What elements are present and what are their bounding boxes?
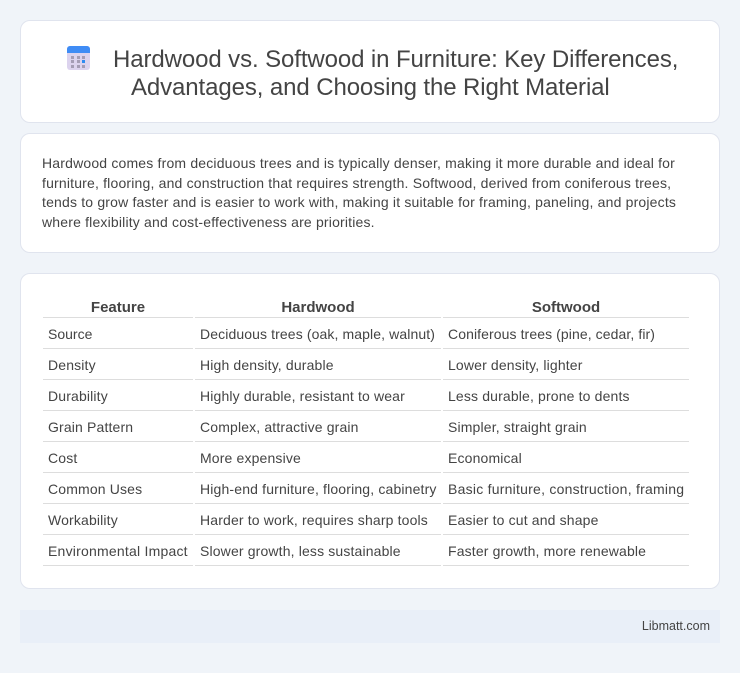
intro text: Hardwood comes from deciduous trees and is typically denser, making it more durable and ideal for [42, 155, 675, 171]
row: grain pattern: Complex, attractive grain [200, 419, 359, 435]
row: grain pattern: Grain Pattern [48, 419, 133, 435]
row: source: Source [48, 326, 92, 342]
row: common uses: Common Uses [48, 481, 142, 497]
row: cost: Cost [48, 450, 77, 466]
table header: Softwood [532, 299, 600, 316]
table header: Hardwood [281, 299, 355, 316]
intro text [42, 155, 676, 230]
row: workability: Easier to cut and shape [448, 512, 599, 528]
comparison table card [20, 273, 720, 589]
row: density: High density, durable [200, 357, 334, 373]
row: density: Lower density, lighter [448, 357, 583, 373]
row: cost [48, 450, 522, 466]
row: durability: Less durable, prone to dents [448, 388, 630, 404]
row: durability: Highly durable, resistant to wear [200, 388, 405, 404]
comparison table [43, 299, 689, 566]
row: durability [48, 388, 630, 404]
row: cost: Economical [448, 450, 522, 466]
row: source: Coniferous trees (pine, cedar, fir) [448, 326, 655, 342]
row: common uses: Basic furniture, construction, framing [448, 481, 684, 497]
footer bar [20, 610, 720, 643]
row: environmental impact: Environmental Impact [48, 543, 188, 559]
intro paragraph card [20, 133, 720, 253]
intro text: furniture, flooring, and construction that requires strength. Softwood, derived from coniferous trees, [42, 175, 671, 191]
table header [91, 299, 600, 316]
row: density [48, 357, 583, 373]
footer credit: Libmatt.com [642, 619, 710, 633]
title heading: Advantages, and Choosing the Right Material [131, 74, 610, 101]
row: workability: Harder to work, requires sharp tools [200, 512, 428, 528]
row: common uses: High-end furniture, flooring, cabinetry [200, 481, 437, 497]
row: source: Deciduous trees (oak, maple, walnut) [200, 326, 435, 342]
intro text: where flexibility and cost-effectiveness are priorities. [42, 214, 375, 230]
row: source [48, 326, 655, 342]
title heading [113, 46, 678, 101]
title card [20, 20, 720, 123]
row: environmental impact [48, 543, 646, 559]
row: workability [48, 512, 599, 528]
row: common uses [48, 481, 684, 497]
title heading: Hardwood vs. Softwood in Furniture: Key Differences, [113, 46, 678, 73]
row: environmental impact: Faster growth, more renewable [448, 543, 646, 559]
icon: calendar [67, 46, 90, 70]
row: grain pattern: Simpler, straight grain [448, 419, 587, 435]
row: grain pattern [48, 419, 587, 435]
table header: Feature [91, 299, 145, 316]
row: environmental impact: Slower growth, less sustainable [200, 543, 401, 559]
row: density: Density [48, 357, 96, 373]
row: workability: Workability [48, 512, 118, 528]
row: durability: Durability [48, 388, 108, 404]
intro text: tends to grow faster and is easier to work with, making it suitable for framing, paneling, and projects [42, 194, 676, 210]
row: cost: More expensive [200, 450, 301, 466]
